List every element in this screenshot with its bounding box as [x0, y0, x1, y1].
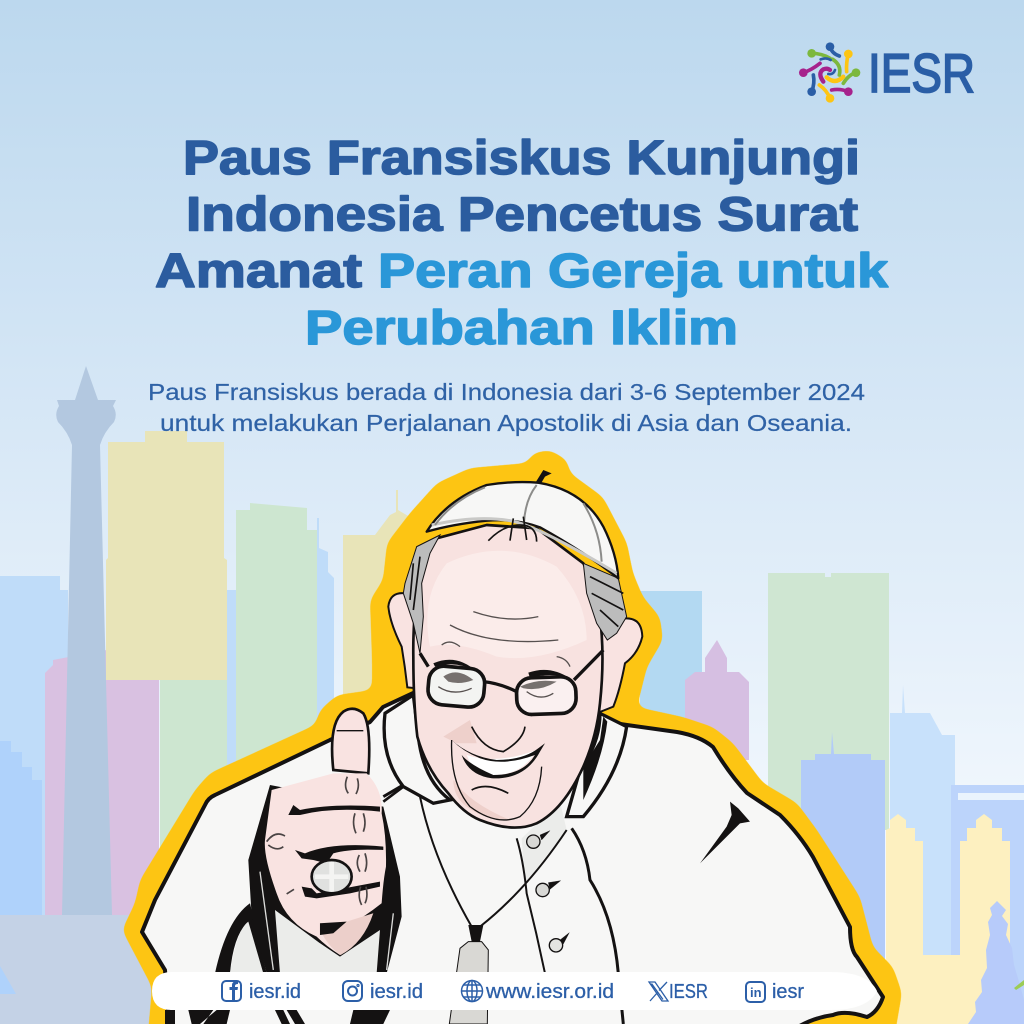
cap band — [432, 519, 617, 573]
left blue building — [0, 576, 68, 915]
title — [155, 132, 888, 355]
blue strip behind towers — [225, 518, 334, 770]
right hair — [583, 563, 627, 640]
lens right — [516, 676, 577, 715]
left hair — [403, 535, 440, 653]
right blue building — [951, 785, 1024, 1024]
bar background — [152, 972, 877, 1010]
lens left — [427, 665, 486, 708]
cord right — [480, 830, 567, 927]
cap seam — [435, 485, 602, 562]
left ear — [388, 593, 420, 688]
collar right — [567, 713, 627, 817]
yellow temples — [886, 814, 1010, 1024]
right robe line — [572, 828, 623, 1024]
wrinkles — [442, 612, 570, 667]
right ear — [597, 618, 642, 713]
robe — [142, 693, 883, 1024]
instagram handle: iesr.id — [370, 981, 423, 1003]
robe crease — [700, 802, 750, 863]
x account — [649, 981, 708, 1003]
eyebrows — [433, 660, 570, 678]
chin crease — [472, 786, 508, 793]
subtitle line 1: Paus Fransiskus berada di Indonesia dari 3-6 September 2024 — [148, 379, 865, 405]
finger lines — [288, 805, 383, 898]
logo swirl icon — [799, 42, 860, 103]
dark band behind hand — [248, 785, 402, 973]
head — [383, 470, 642, 828]
glasses bridge and arms — [420, 650, 603, 692]
instagram — [343, 981, 423, 1003]
cord left — [420, 797, 472, 927]
monas platform — [0, 915, 160, 1024]
linkedin — [746, 981, 804, 1003]
linkedin icon: in — [750, 985, 762, 1000]
strap highlights — [260, 872, 393, 970]
zucchetto cap — [427, 482, 618, 578]
collar strut — [383, 787, 403, 802]
facebook — [222, 981, 301, 1003]
purple dome building — [685, 640, 749, 760]
chin shading — [443, 720, 510, 820]
title line 4: Perubahan Iklim — [305, 302, 738, 355]
globe icon — [462, 980, 482, 1002]
hand and straps — [165, 709, 403, 1024]
instagram icon — [343, 981, 362, 1001]
eye lines — [438, 687, 553, 697]
cheek line left — [452, 740, 542, 820]
x handle: IESR — [669, 981, 708, 1003]
mouth — [452, 740, 545, 778]
yellow building centre — [343, 490, 415, 720]
logo — [799, 42, 975, 104]
subtitle line 2: untuk melakukan Perjalanan Apostolik di Asia dan Oseania. — [160, 410, 852, 436]
thumb — [332, 709, 369, 773]
pope illustration — [122, 450, 902, 1024]
hair strands — [410, 557, 623, 627]
nose — [472, 727, 525, 752]
green leaf — [1014, 980, 1024, 990]
button 2 — [536, 881, 561, 897]
yellow sticker outline — [122, 450, 902, 1024]
yellow tower — [106, 431, 227, 680]
navy blue tower — [801, 732, 885, 1000]
social media bar — [152, 972, 877, 1010]
ring — [312, 860, 352, 893]
pectoral cross — [449, 942, 488, 1024]
wrist lines — [320, 922, 347, 935]
forehead highlight — [427, 551, 587, 658]
title line 3 light: Peran Gereja untuk — [378, 245, 888, 298]
green tall building — [236, 503, 317, 780]
facebook icon — [222, 981, 241, 1002]
button 3 — [549, 933, 569, 952]
cap stem — [535, 470, 552, 484]
website — [462, 980, 614, 1003]
left strap loop — [215, 903, 267, 973]
website url: www.iesr.or.id — [485, 981, 614, 1003]
collar strut line — [383, 785, 403, 797]
placket line — [517, 838, 545, 973]
cord knot — [468, 925, 483, 942]
knuckle lines — [267, 777, 367, 905]
button 1 — [527, 831, 550, 848]
city skyline — [0, 366, 1024, 1024]
title line 1: Paus Fransiskus Kunjungi — [183, 132, 860, 185]
collar left — [384, 695, 450, 803]
collar shade — [583, 717, 607, 800]
robe under hand — [275, 910, 380, 973]
window strip — [958, 793, 1024, 800]
linkedin handle: iesr — [772, 981, 804, 1003]
blue building right of head — [640, 591, 702, 726]
face — [413, 525, 602, 828]
thumb crease — [337, 729, 363, 733]
purple building — [45, 650, 159, 915]
light blue tower — [890, 685, 955, 955]
logo wordmark: IESR — [868, 42, 975, 104]
subtitle — [148, 379, 865, 436]
title line 3 dark: Amanat — [155, 245, 362, 298]
pagoda — [968, 901, 1024, 1024]
green building lower — [160, 680, 227, 870]
fringe — [488, 517, 537, 542]
eye right — [520, 681, 557, 689]
monas monument — [56, 366, 116, 915]
palm shading — [320, 913, 373, 955]
teeth — [467, 750, 537, 775]
green building right — [768, 573, 889, 830]
collar placket — [522, 802, 567, 883]
title line 2: Indonesia Pencetus Surat — [186, 188, 858, 242]
inner shade — [230, 922, 263, 973]
chest details — [420, 797, 623, 1024]
lower left stepped building — [0, 741, 42, 915]
bottom strap pieces — [165, 1010, 390, 1024]
fist — [265, 773, 386, 955]
small blue shape — [0, 966, 16, 994]
eye left — [443, 672, 473, 683]
x icon — [649, 982, 668, 1001]
ring cross — [315, 862, 348, 892]
facebook handle: iesr.id — [249, 981, 301, 1003]
